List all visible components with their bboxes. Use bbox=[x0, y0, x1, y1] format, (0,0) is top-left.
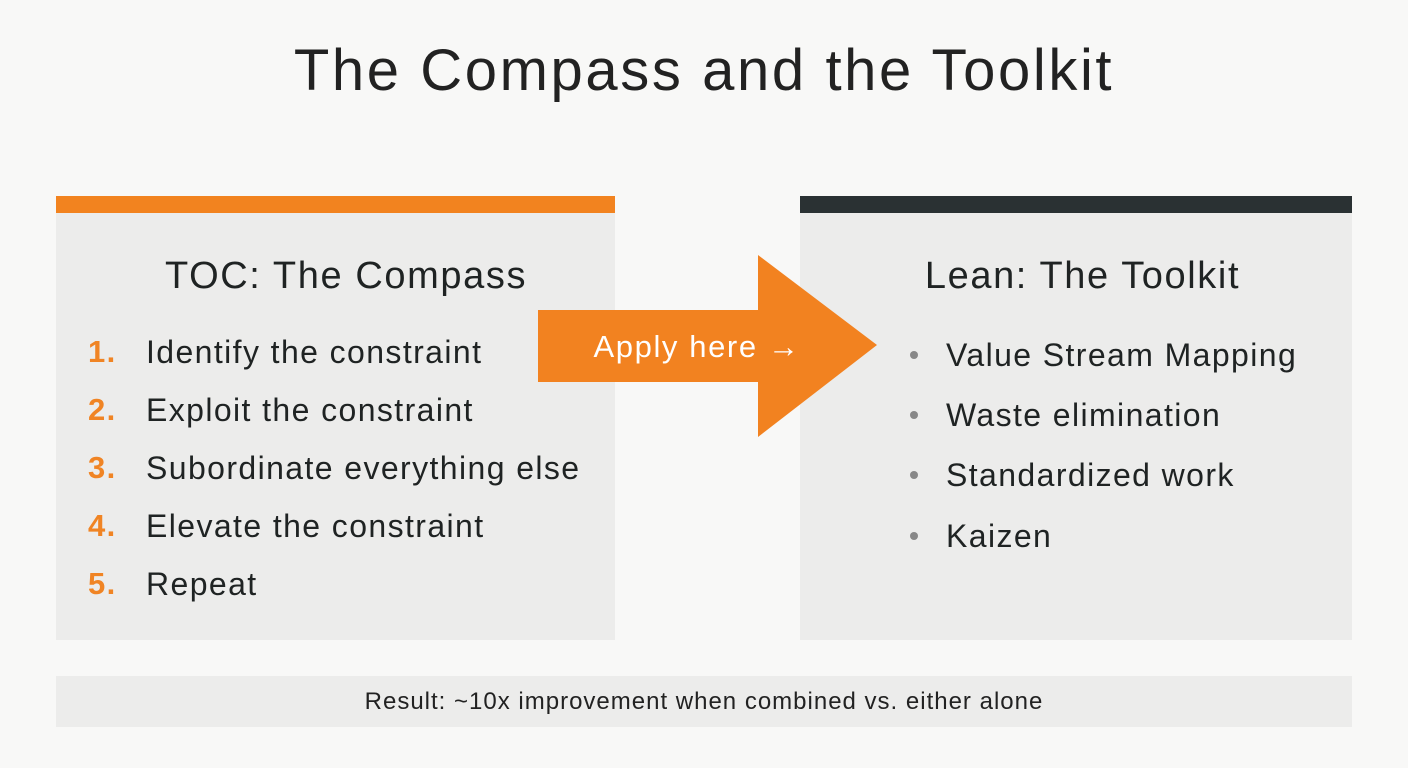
panel: TOC compass bbox=[56, 196, 615, 640]
result bar: Result: ~10x improvement when combined vs. either alone bbox=[365, 688, 1043, 715]
heading: Lean: Lean: The Toolkit bbox=[925, 255, 1240, 297]
list: 5 steps: Repeat bbox=[146, 566, 258, 602]
arrow: apply here bbox=[538, 255, 877, 437]
list: 5 steps: 5. bbox=[88, 566, 117, 601]
orange top bar bbox=[56, 196, 615, 213]
list: 5 steps bbox=[88, 334, 581, 602]
arrow: apply here: Apply here → bbox=[593, 329, 801, 364]
result bar bbox=[56, 676, 1352, 727]
list: 5 steps: 4. bbox=[88, 508, 117, 543]
dark top bar bbox=[800, 196, 1352, 213]
heading: TOC: TOC: The Compass bbox=[165, 255, 527, 297]
list: 5 steps: Exploit the constraint bbox=[146, 392, 474, 428]
panel: Lean toolkit bbox=[800, 196, 1352, 640]
list: 5 steps: 1. bbox=[88, 334, 117, 369]
list: 5 steps: 3. bbox=[88, 450, 117, 485]
list: 5 steps: Subordinate everything else bbox=[146, 450, 581, 486]
list: lean tools: Kaizen bbox=[946, 518, 1052, 554]
list: lean tools: Standardized work bbox=[946, 457, 1235, 493]
title: The Compass and the Toolkit bbox=[294, 38, 1114, 103]
list: lean tools: Waste elimination bbox=[946, 397, 1221, 433]
list: 5 steps: Elevate the constraint bbox=[146, 508, 485, 544]
list: lean tools: Value Stream Mapping bbox=[946, 337, 1297, 373]
list: 5 steps: 2. bbox=[88, 392, 117, 427]
list: 5 steps: Identify the constraint bbox=[146, 334, 482, 370]
list: lean tools bbox=[910, 337, 1297, 554]
